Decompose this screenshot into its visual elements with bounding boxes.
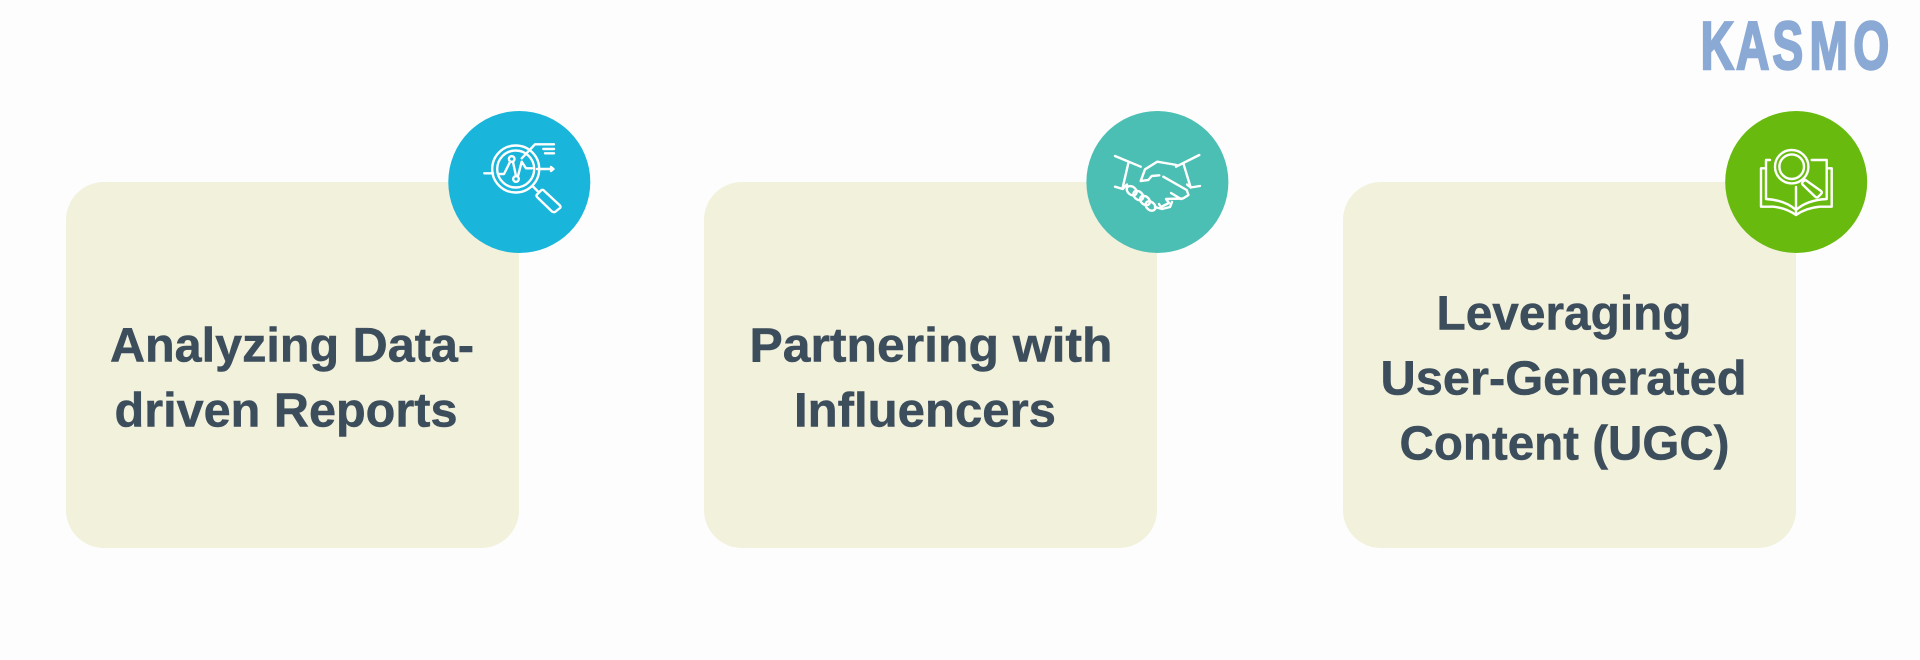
heading: leveraging user-generated content (UGC) [1380,287,1746,470]
heading: analyzing data-driven reports [110,320,474,438]
heading: analyzing data-driven reports: driven Reports [114,385,458,438]
icon: handshake [1115,155,1200,213]
heading: analyzing data-driven reports: Analyzing Data- [110,320,474,373]
panel: analyzing data-driven reports [66,111,590,548]
panel: leveraging user-generated content [1343,111,1867,548]
icon circle: green [1725,111,1867,253]
icon: magnifier over data chart [484,144,560,212]
heading: leveraging user-generated content (UGC): Leveraging [1436,287,1692,340]
heading: leveraging user-generated content (UGC): User-Generated [1380,352,1746,405]
card background [66,182,519,548]
heading: leveraging user-generated content (UGC): Content (UGC) [1400,417,1730,470]
card background [1343,182,1796,548]
icon circle: teal [1086,111,1228,253]
heading: partnering with influencers: Partnering with [750,320,1112,373]
icon circle: blue [448,111,590,253]
logo: KASMO: KASMO [1701,8,1889,84]
icon: book with magnifier [1761,150,1832,215]
heading: partnering with influencers [750,320,1112,438]
panel: partnering with influencers [704,111,1228,548]
card background [704,182,1157,548]
heading: partnering with influencers: Influencers [794,385,1056,438]
